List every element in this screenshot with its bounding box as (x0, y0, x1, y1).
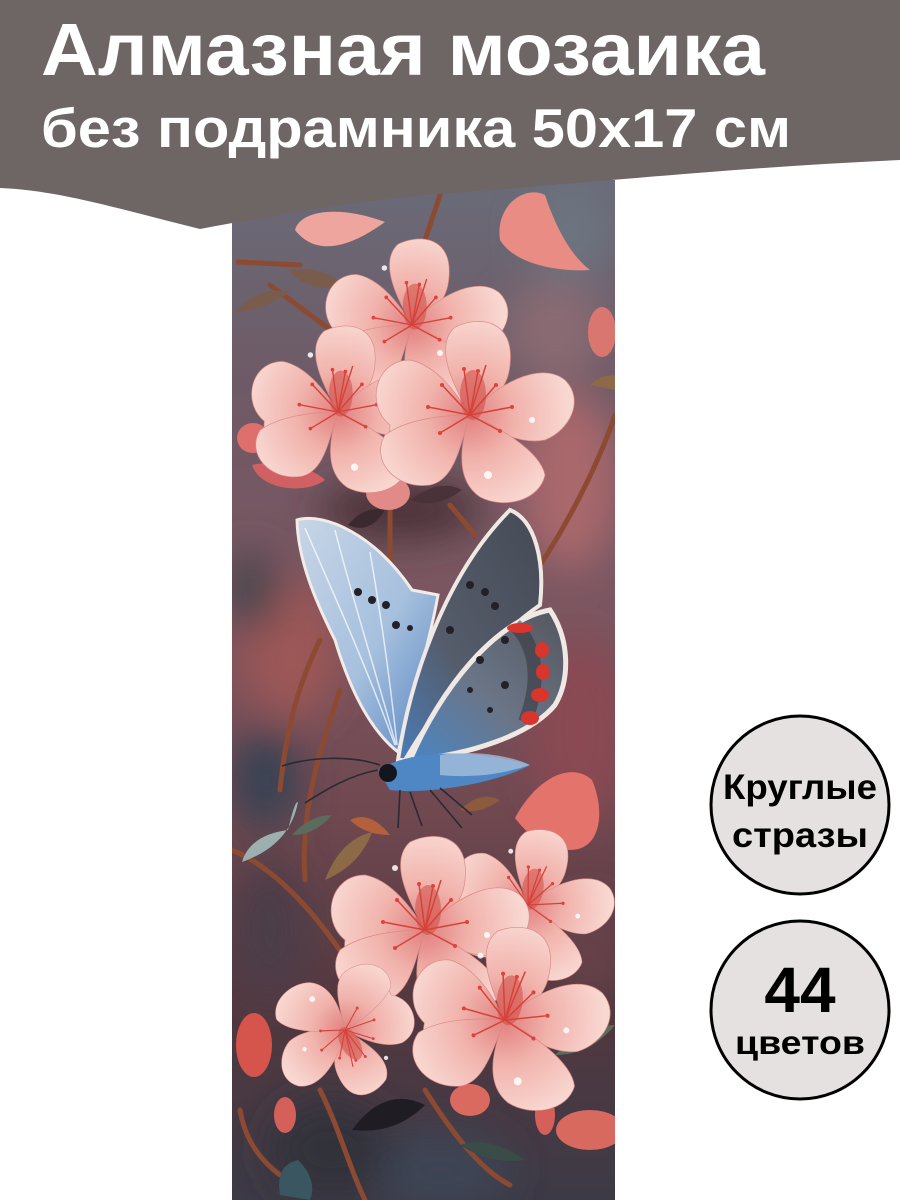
header banner (0, 0, 900, 229)
lower flowers (275, 829, 615, 1111)
badge: 44 colours: 44 (764, 954, 836, 1026)
small insect (242, 802, 298, 862)
badge: round rhinestones (711, 716, 889, 894)
badge: round rhinestones: Круглые (723, 768, 877, 807)
artwork: butterfly and flowers (220, 180, 630, 1200)
stems (232, 195, 615, 1200)
right hindwing (410, 610, 566, 760)
badge: 44 colours (711, 921, 889, 1099)
title: Алмазная мозаика (41, 8, 766, 91)
wing spots (354, 581, 509, 713)
badge: 44 colours: цветов (735, 1024, 865, 1061)
butterfly (282, 510, 566, 828)
upper flowers (252, 239, 574, 503)
leaves (235, 269, 615, 1200)
left wing (297, 518, 438, 752)
right forewing (398, 510, 541, 760)
body (378, 754, 530, 791)
subtitle: без подрамника 50х17 см (41, 97, 791, 159)
upper buds (236, 192, 624, 1150)
badge: round rhinestones: стразы (732, 816, 868, 855)
title (41, 8, 791, 159)
